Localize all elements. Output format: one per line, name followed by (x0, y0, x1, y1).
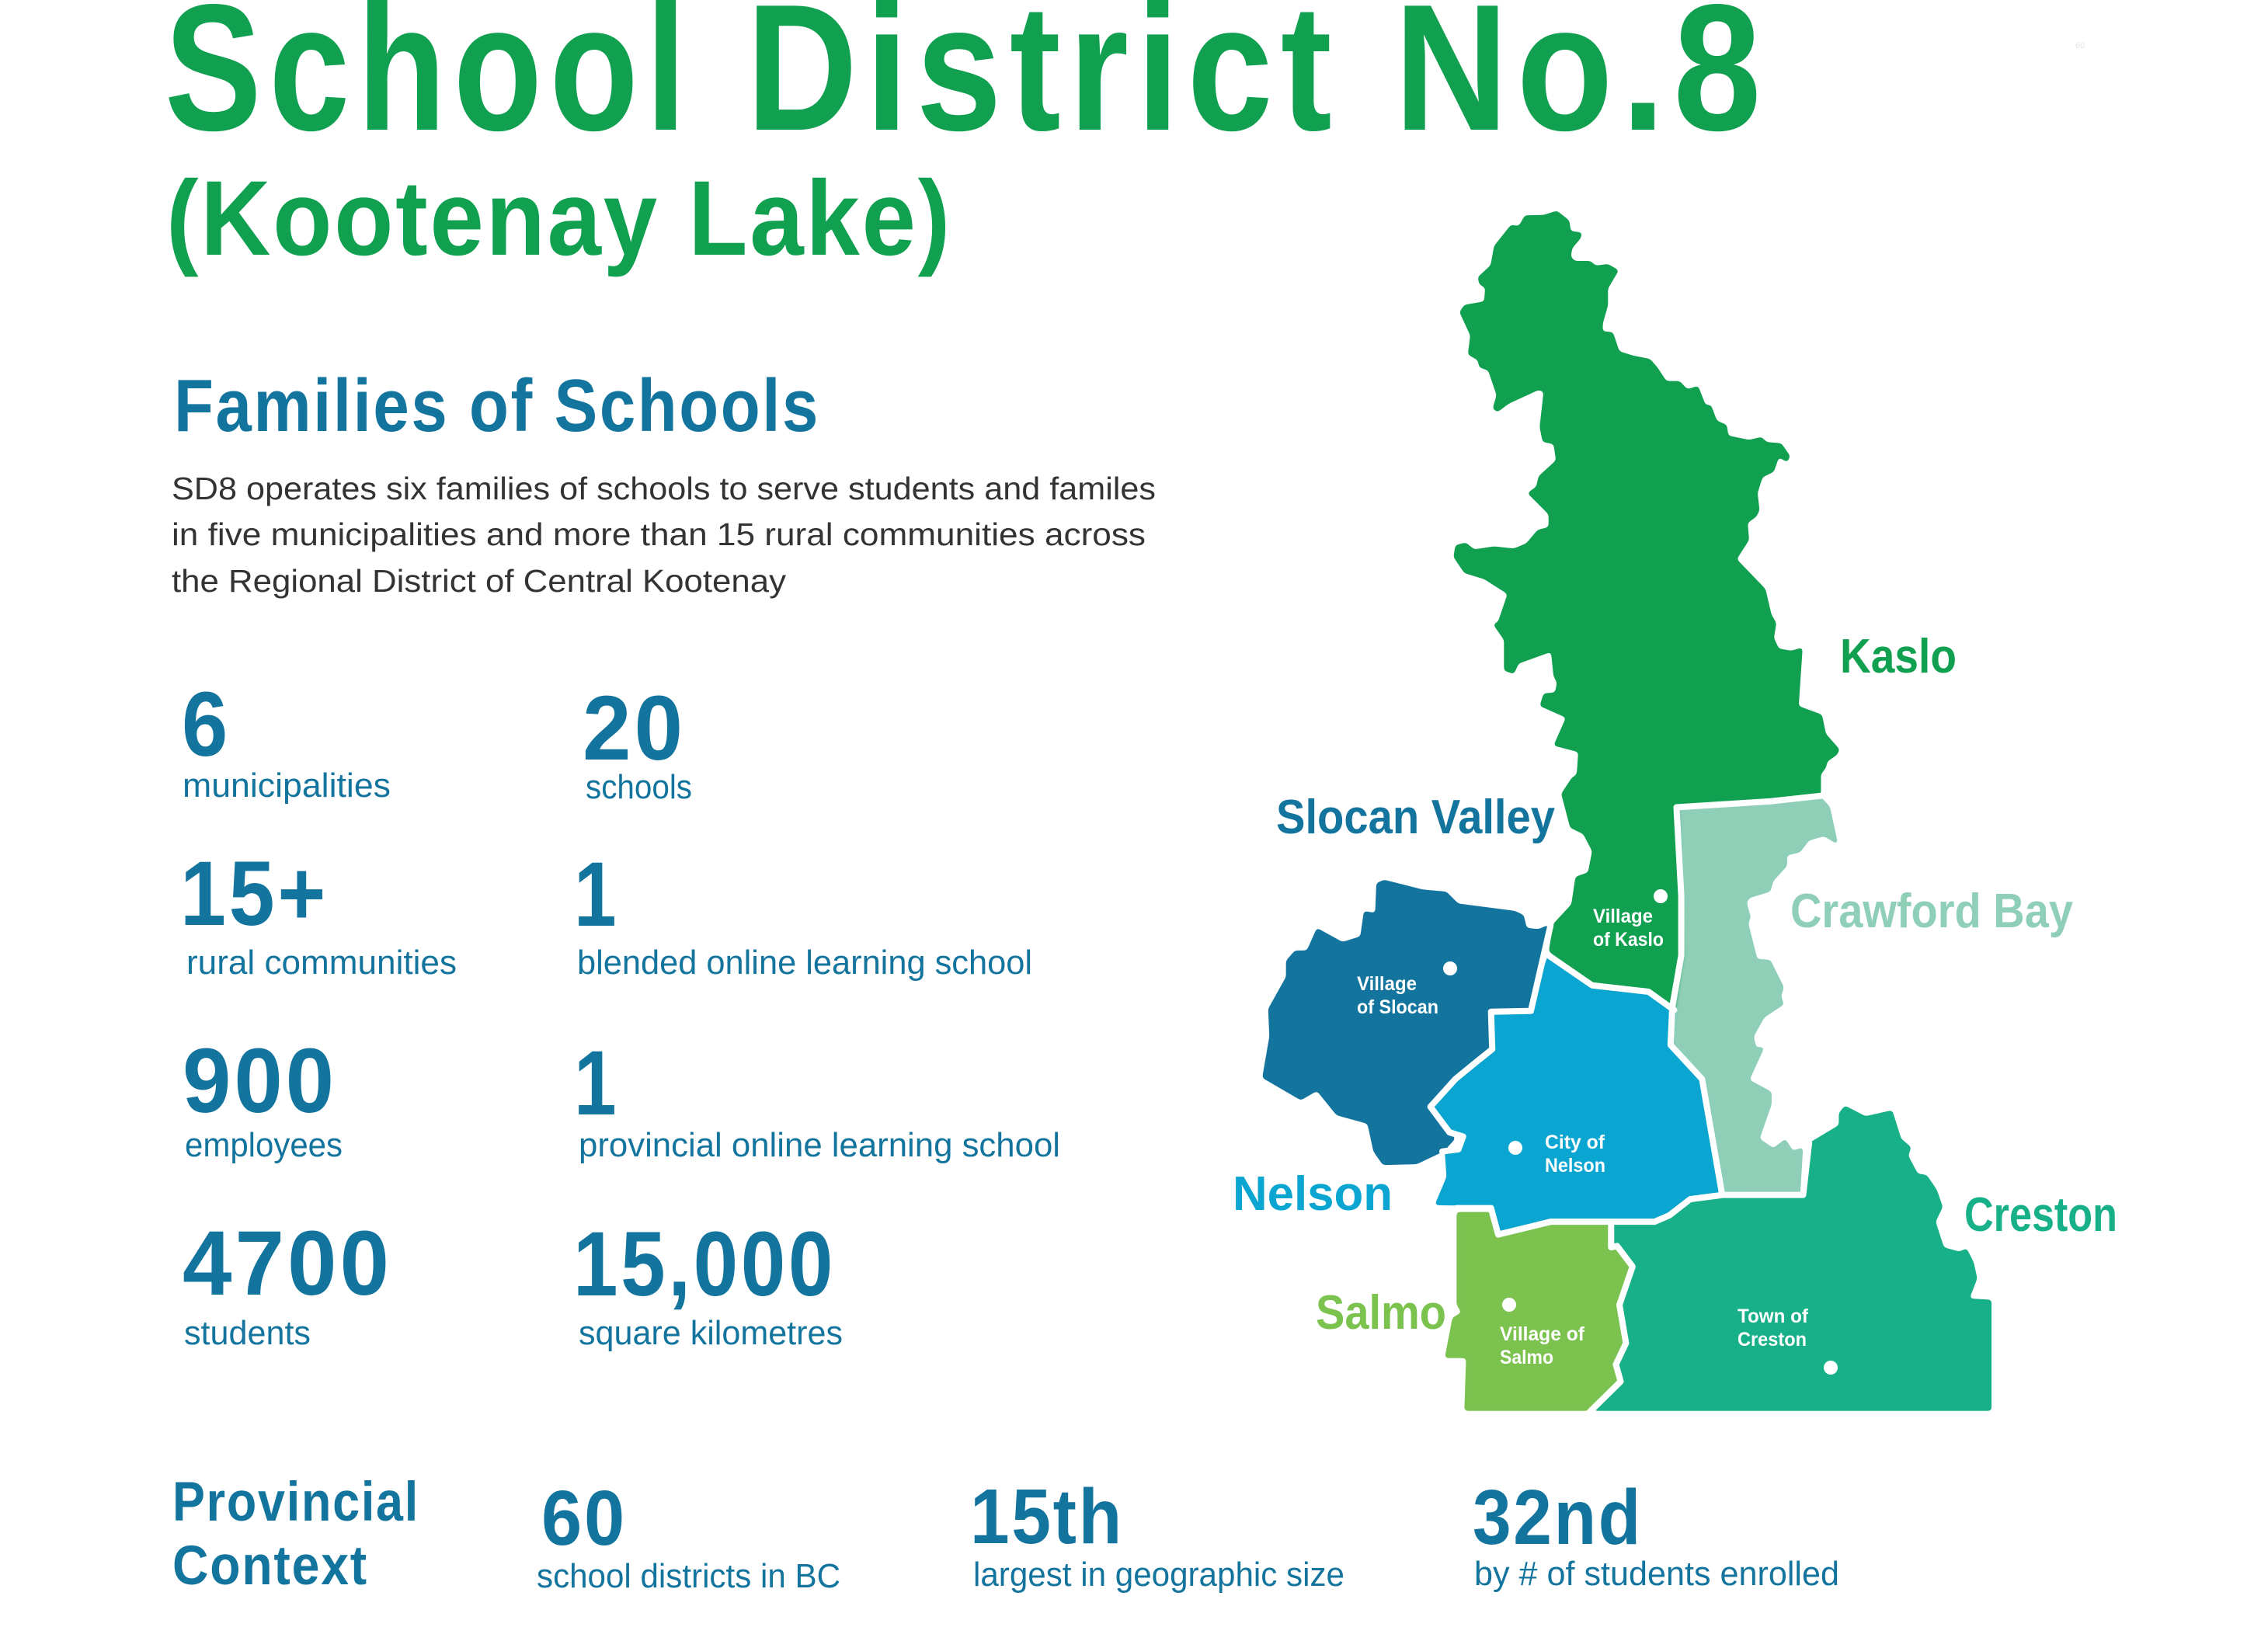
stat: 1 provincial online learning school (574, 1032, 1060, 1164)
context stat: 32nd by students: by # of students enrolled (1474, 1555, 1839, 1593)
stat: 20 schools: 20 (583, 677, 686, 780)
context stat: 15th largest: largest in geographic size (973, 1556, 1344, 1594)
stat: 1 blended online learning school (574, 843, 1032, 982)
region name: Slocan Valley: Slocan Valley (1276, 791, 1555, 844)
intro paragraph (172, 471, 1156, 599)
context stat: 15th largest: 15th (970, 1473, 1124, 1560)
stat: 6 municipalities: municipalities (183, 767, 391, 805)
region name: Crawford Bay: Crawford Bay (1790, 885, 2073, 938)
label: Town of Creston: Town of (1738, 1305, 1809, 1327)
stat: 15,000 square kilometres: 15,000 (573, 1213, 836, 1316)
region name: Creston: Creston (1964, 1188, 2117, 1242)
region borders (1431, 796, 1821, 1411)
region: Creston (1592, 1105, 1991, 1411)
intro paragraph: the Regional District of Central Kootenay (172, 563, 787, 599)
label: Village of Salmo (1500, 1323, 1585, 1368)
title: (Kootenay Lake) (166, 159, 952, 278)
label: City of Nelson (1545, 1132, 1605, 1177)
region fills with softened outlines (1262, 210, 1991, 1411)
title (165, 0, 1769, 278)
stat: 6 municipalities: 6 (182, 673, 231, 776)
context stat: 60 school districts (537, 1475, 840, 1595)
stat: 15,000 square kilometres (573, 1213, 843, 1352)
context stat: 15th largest (970, 1473, 1344, 1594)
region: Salmo (1445, 1212, 1633, 1411)
context stat: 60 school districts: 60 (541, 1475, 627, 1562)
label: Village of Kaslo (1593, 906, 1664, 951)
stat: 900 employees: employees (185, 1126, 343, 1164)
stat: 15+ rural communities: rural communities (186, 944, 457, 982)
intro paragraph: in five municipalities and more than 15 rural communities across (172, 516, 1146, 552)
stat: 900 employees: 900 (183, 1030, 337, 1132)
region name: Kaslo: Kaslo (1840, 630, 1957, 683)
label: Village of Slocan: Village (1357, 973, 1417, 995)
small faint mark: 60 (2075, 41, 2085, 50)
context stat: 32nd by students: 32nd (1473, 1474, 1643, 1561)
heading: Provincial Context (172, 1472, 419, 1597)
label: Town of Creston: Creston (1738, 1329, 1807, 1351)
region: Kaslo (1453, 210, 1840, 1009)
label: Village of Kaslo: of Kaslo (1593, 929, 1664, 951)
region name: Salmo: Salmo (1316, 1286, 1446, 1340)
region name: Nelson: Nelson (1233, 1167, 1393, 1221)
stat: 1 blended online learning school: blended online learning school (577, 944, 1032, 982)
stat: 15,000 square kilometres: square kilometres (579, 1314, 843, 1352)
label: Town of Creston (1738, 1305, 1809, 1351)
stat: 1 provincial online learning school: provincial online learning school (579, 1126, 1060, 1164)
stat: 1 blended online learning school: 1 (574, 843, 619, 946)
intro paragraph: SD8 operates six families of schools to serve students and familes (172, 471, 1156, 506)
label: Village of Salmo: Village of (1500, 1323, 1585, 1345)
stat: 15+ rural communities: 15+ (180, 843, 329, 945)
context stat: 32nd by students (1473, 1474, 1839, 1593)
region: Nelson (1431, 955, 1722, 1235)
label: Village of Kaslo: Village (1593, 906, 1653, 927)
label: City of Nelson: Nelson (1545, 1155, 1605, 1177)
stat: 1 provincial online learning school: 1 (574, 1032, 619, 1135)
label: Village of Slocan (1357, 973, 1438, 1018)
stat: 6 municipalities (182, 673, 391, 805)
label: Village of Salmo: Salmo (1500, 1347, 1553, 1368)
label: Village of Slocan: of Slocan (1357, 996, 1438, 1018)
map of district regions (1262, 210, 1991, 1411)
region: Slocan Valley (1262, 880, 1550, 1165)
heading: Provincial Context: Provincial (172, 1472, 419, 1533)
heading: Families of Schools: Families of Schools (174, 364, 820, 447)
stat: 4700 students: 4700 (183, 1212, 392, 1315)
stat: 15+ rural communities (180, 843, 457, 982)
heading: Provincial Context: Context (172, 1535, 368, 1597)
stat: 4700 students: students (184, 1314, 311, 1352)
town dots (1443, 889, 1838, 1375)
stat: 20 schools: schools (586, 768, 692, 806)
label: City of Nelson: City of (1545, 1132, 1605, 1153)
context stat: 60 school districts: school districts in BC (537, 1557, 840, 1595)
region: Crawford Bay (1672, 797, 1838, 1194)
